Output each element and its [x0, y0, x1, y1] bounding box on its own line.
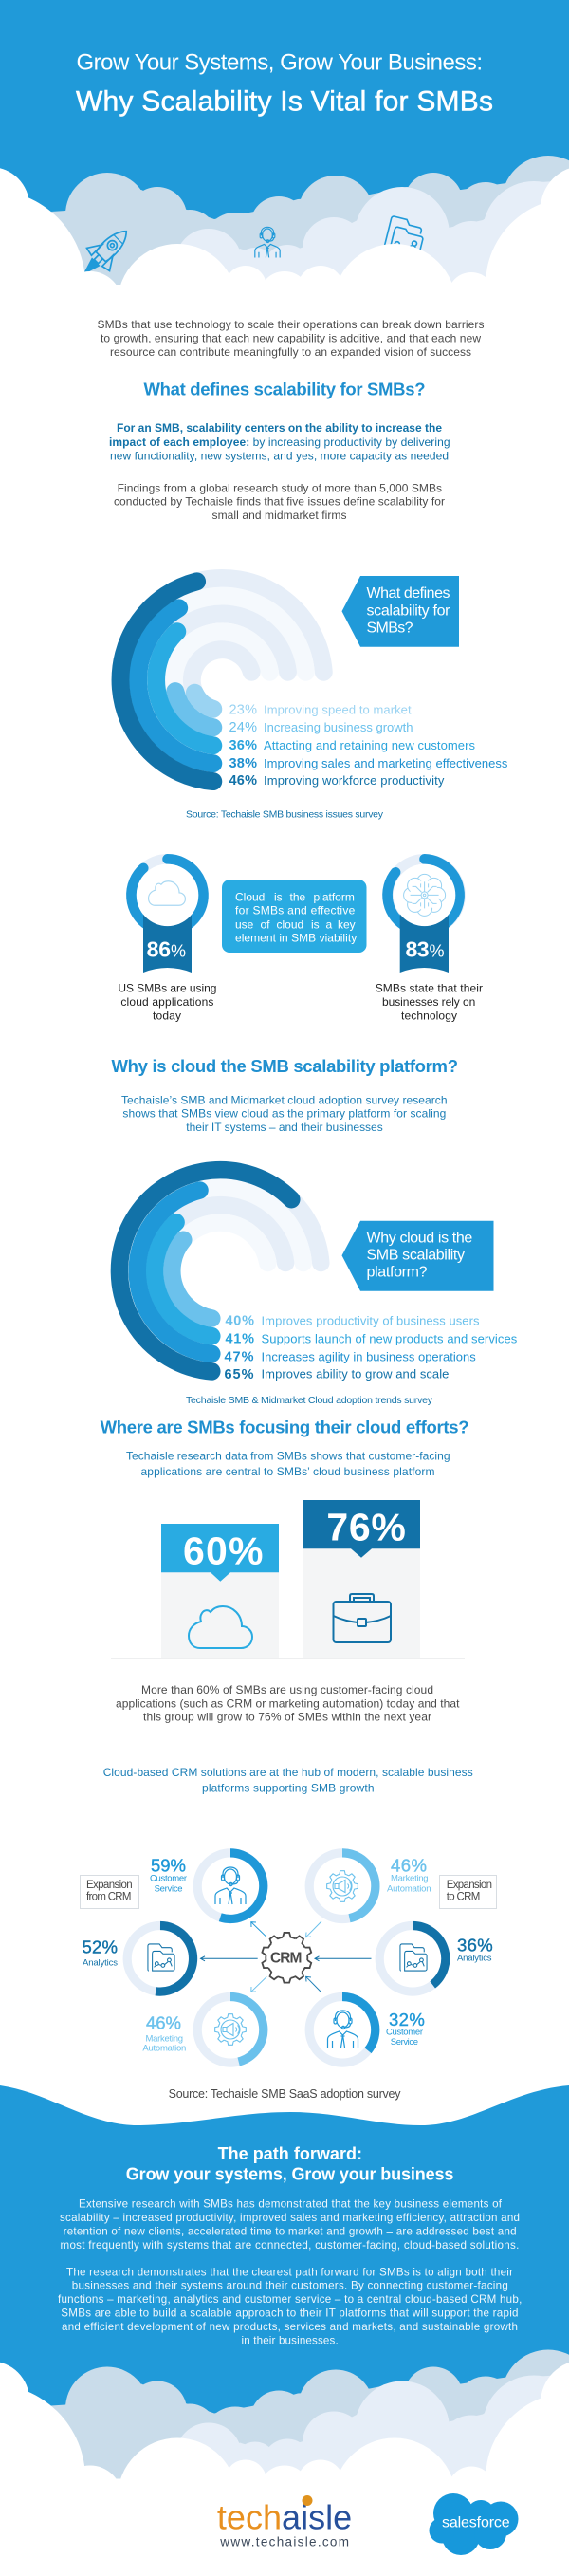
chart legend: scalability issues: 38% — [229, 756, 257, 771]
growth paragraph: More than 60% of SMBs are using customer-facing cloud — [141, 1683, 433, 1696]
chart legend: cloud benefits: 47% — [224, 1349, 254, 1364]
badge captions: businesses rely on — [382, 995, 475, 1009]
label: 46 percent marketing automation lower — [142, 2012, 186, 2054]
label: 46 percent marketing automation lower: Automation — [142, 2044, 186, 2054]
callout: why cloud: SMB scalability — [366, 1247, 465, 1263]
focus paragraph: applications are central to SMBs’ cloud business platform — [140, 1465, 434, 1478]
title: Grow Your Systems, Grow Your Business: — [76, 49, 483, 75]
intro paragraph: resource can contribute meaningfully to an expanded vision of success — [110, 345, 471, 359]
callout: what defines scalability: scalability for — [366, 602, 450, 619]
callout: cloud is the platform — [222, 880, 366, 953]
callout: cloud is the platform: use — [235, 917, 254, 931]
source note 3: Source: Techaisle SMB SaaS adoption survey — [169, 2087, 401, 2101]
intro paragraph: to growth, ensuring that each new capability is additive, and that each new — [101, 332, 481, 345]
footer paragraph 1: retention of new clients, accelerated time to market and growth – are addressed best and — [64, 2225, 517, 2237]
growth paragraph: applications (such as CRM or marketing automation) today and that — [116, 1696, 460, 1710]
chart legend: cloud benefits: 41% — [226, 1332, 254, 1347]
logo: techaisle: www.techaisle.com — [219, 2534, 349, 2548]
footer paragraph 2: in their businesses. — [241, 2334, 339, 2346]
source note 1: Source: Techaisle SMB business issues survey — [186, 809, 384, 821]
bar: 76 percent: 76% — [326, 1505, 406, 1548]
footer paragraph 2 — [58, 2266, 522, 2346]
label: 36 percent analytics: Analytics — [457, 1954, 492, 1964]
callout: why cloud: platform? — [366, 1264, 428, 1280]
chart legend: cloud benefits: Increases agility in business operations — [262, 1349, 476, 1364]
label: 32 percent customer service: Customer — [386, 2028, 423, 2038]
title: Why Scalability Is Vital for SMBs — [76, 86, 493, 118]
footer paragraph 2: businesses and their systems around their customers. By connecting customer-facing — [72, 2280, 508, 2292]
label: 32 percent customer service — [386, 2010, 425, 2048]
findings paragraph: conducted by Techaisle finds that five issues define scalability for — [114, 495, 445, 509]
header background — [0, 0, 569, 308]
chart legend: cloud benefits: Supports launch of new products and services — [262, 1332, 518, 1346]
CRM intro paragraph: Cloud-based CRM solutions are at the hub of modern, scalable business — [103, 1766, 473, 1779]
logo: salesforce: salesforce — [442, 2514, 510, 2530]
callout: cloud is the platform: for SMBs and effective — [235, 904, 356, 917]
CRM intro paragraph: platforms supporting SMB growth — [202, 1781, 374, 1794]
logo: salesforce — [429, 2493, 518, 2555]
header clouds front layer — [0, 166, 569, 380]
intro paragraph: SMBs that use technology to scale their operations can break down barriers — [97, 318, 484, 331]
heading: what defines scalability: What defines scalability for SMBs? — [144, 380, 425, 399]
findings paragraph — [114, 481, 445, 522]
chart legend: scalability issues: 36% — [229, 738, 257, 753]
label: 52 percent analytics: Analytics — [83, 1958, 118, 1969]
CRM intro paragraph — [103, 1766, 473, 1794]
cloud paragraph: Techaisle’s SMB and Midmarket cloud adoption survey research — [121, 1093, 448, 1106]
label: 46 percent marketing automation: Marketing — [391, 1874, 429, 1884]
ring: marketing automation 46 percent — [309, 1853, 376, 1918]
heading: path forward — [126, 2144, 453, 2184]
icon: rocket — [73, 220, 138, 285]
label: 46 percent marketing automation lower: Marketing — [146, 2034, 183, 2045]
chart legend: scalability issues: Improving speed to market — [264, 702, 412, 717]
growth paragraph: this group will grow to 76% of SMBs within the next year — [143, 1711, 431, 1724]
label: 46 percent marketing automation: 46% — [391, 1856, 427, 1876]
footer paragraph 1: scalability – increased productivity, improved sales and marketing efficiency, attraction and — [60, 2212, 520, 2224]
label: 32 percent customer service: 32% — [389, 2010, 425, 2029]
chart legend: cloud benefits: Improves ability to grow and scale — [262, 1366, 449, 1381]
chart legend: cloud benefits: 40% — [226, 1314, 254, 1329]
icon: circuit flower — [404, 874, 446, 916]
title — [76, 49, 493, 118]
cloud paragraph — [121, 1093, 448, 1134]
label: 59 percent customer service — [150, 1856, 187, 1894]
box: expansion to CRM: to CRM — [447, 1891, 480, 1902]
CRM hub gear: CRM — [270, 1950, 302, 1966]
box: expansion to CRM: Expansion — [447, 1880, 492, 1891]
ring: analytics 36 percent — [379, 1926, 446, 1992]
ring: marketing automation 46 percent lower — [197, 1996, 264, 2063]
cloud paragraph: their IT systems – and their businesses — [186, 1121, 383, 1134]
icon: folder — [383, 216, 427, 259]
box: expansion to CRM — [440, 1875, 497, 1909]
cloud paragraph: shows that SMBs view cloud as the primary platform for scaling — [122, 1107, 446, 1121]
callout: cloud is the platform: a — [326, 917, 332, 931]
badge: 83 percent: 83 — [406, 936, 429, 961]
footer paragraph 1: Extensive research with SMBs has demonstrated that the key business elements of — [79, 2198, 503, 2211]
chart legend: cloud benefits: 65% — [224, 1367, 254, 1382]
footer wave background — [0, 2085, 569, 2502]
callout: why cloud: Why cloud is the — [366, 1230, 472, 1246]
label: 46 percent marketing automation lower: 46% — [146, 2012, 181, 2032]
highlighted paragraph: new functionality, new systems, and yes, more capacity as needed — [110, 449, 449, 462]
callout: why cloud — [341, 1221, 493, 1291]
logo: techaisle: techaisle — [217, 2498, 352, 2537]
box: expansion from CRM — [80, 1875, 138, 1909]
label: 52 percent analytics: 52% — [82, 1937, 118, 1956]
label: 59 percent customer service: 59% — [151, 1856, 186, 1876]
chart legend: scalability issues: 24% — [229, 720, 257, 735]
ring: analytics 52 percent — [127, 1926, 193, 1992]
callout: cloud is the platform: is — [274, 890, 283, 903]
box: expansion from CRM: Expansion — [86, 1880, 133, 1891]
badge: 86 percent: % — [171, 941, 186, 960]
CRM hub gear — [260, 1933, 313, 1983]
heading: path forward: The path forward: — [218, 2144, 362, 2163]
footer paragraph 2: The research demonstrates that the clearest path forward for SMBs is to align both their — [66, 2266, 513, 2278]
label: 46 percent marketing automation — [387, 1856, 431, 1894]
footer paragraph 2: functions – marketing, analytics and customer service – to a central cloud-based CRM hub, — [58, 2293, 522, 2306]
badge captions: SMBs state that their — [376, 982, 483, 995]
highlighted paragraph — [109, 421, 450, 462]
chart legend: cloud benefits: Improves productivity of business users — [262, 1314, 480, 1328]
badge captions — [118, 982, 483, 1022]
label: 36 percent analytics: 36% — [457, 1936, 493, 1955]
label: 59 percent customer service: Customer — [150, 1874, 187, 1884]
findings paragraph: small and midmarket firms — [212, 509, 347, 522]
chart legend: scalability issues: Attacting and retaining new customers — [264, 738, 476, 752]
chart legend: scalability issues: Improving workforce productivity — [264, 773, 445, 788]
intro paragraph — [97, 318, 484, 359]
bar: 60 percent: 60% — [183, 1529, 264, 1572]
radial chart: cloud benefits — [119, 1170, 321, 1371]
label: 32 percent customer service: Service — [391, 2037, 418, 2048]
footer paragraph 2: and efficient development of new products, services and markets, and sustainable growth — [62, 2321, 518, 2333]
chart legend: scalability issues: Increasing business growth — [264, 720, 413, 734]
badge: 86 percent — [131, 859, 204, 973]
header clouds back layers — [51, 156, 569, 308]
findings paragraph: Findings from a global research study of more than 5,000 SMBs — [118, 481, 442, 494]
callout: what defines scalability: SMBs? — [366, 621, 413, 637]
icon: support agent — [255, 227, 280, 257]
label: 46 percent marketing automation: Automation — [387, 1883, 431, 1894]
badge: 86 percent: 86 — [147, 936, 171, 961]
callout: cloud is the platform: cloud — [277, 917, 303, 931]
bar: 60 percent — [161, 1524, 279, 1658]
focus paragraph — [126, 1449, 450, 1478]
chart legend: scalability issues: 46% — [229, 773, 257, 788]
label: 52 percent analytics — [82, 1937, 118, 1969]
CRM hub diagram — [80, 1853, 497, 2063]
heading: path forward: Grow your systems, Grow your business — [126, 2165, 453, 2184]
chart legend: scalability issues: Improving sales and marketing effectiveness — [264, 756, 508, 770]
ring: customer service 59 percent — [197, 1853, 264, 1919]
callout: cloud is the platform: element in SMB viability — [235, 932, 357, 945]
footer paragraph 1 — [60, 2198, 520, 2252]
radial chart: scalability issues — [120, 578, 323, 782]
callout: what defines scalability: What defines — [366, 585, 450, 602]
badge captions: today — [153, 1009, 181, 1022]
footer paragraph 2: SMBs are able to build a scalable approach to their IT platforms that will support the rapid — [61, 2307, 519, 2319]
highlighted paragraph: For an SMB, scalability centers on the ability to increase the — [117, 421, 442, 435]
footer paragraph 1: most frequently with systems that are connected, customer-facing, cloud-based solutions. — [61, 2239, 519, 2252]
growth paragraph — [116, 1683, 460, 1724]
ring: customer service 32 percent — [309, 1996, 376, 2063]
chart legend: scalability issues — [229, 702, 508, 788]
box: expansion from CRM: from CRM — [86, 1891, 131, 1902]
callout: cloud is the platform: Cloud — [235, 890, 265, 903]
chart legend: cloud benefits — [224, 1314, 518, 1382]
label: 59 percent customer service: Service — [155, 1883, 183, 1894]
badge captions: US SMBs are using — [118, 982, 216, 995]
callout: cloud is the platform: platform — [313, 890, 355, 903]
badge captions: technology — [401, 1009, 457, 1022]
focus paragraph: Techaisle research data from SMBs shows that customer-facing — [126, 1449, 450, 1462]
chart legend: scalability issues: 23% — [229, 702, 257, 717]
callout: cloud is the platform: is — [311, 917, 320, 931]
callout: cloud is the platform: the — [290, 890, 306, 903]
badge captions: cloud applications — [120, 995, 213, 1009]
callout: what defines scalability — [341, 576, 459, 647]
callout: cloud is the platform: key — [338, 917, 356, 931]
bar: 76 percent — [303, 1500, 420, 1658]
badge: 83 percent: % — [429, 941, 445, 960]
heading: why is cloud: Why is cloud the SMB scalability platform? — [112, 1056, 458, 1076]
callout: cloud is the platform: of — [260, 917, 270, 931]
icon: briefcase — [334, 1594, 391, 1642]
highlighted paragraph: impact of each employee: by increasing productivity by delivering — [109, 436, 450, 449]
footer clouds — [0, 2349, 569, 2573]
arrows: hub connections — [201, 1921, 372, 1992]
badge: 83 percent — [388, 859, 461, 973]
heading: where are SMBs focusing: Where are SMBs focusing their cloud efforts? — [101, 1418, 469, 1437]
source note 2: Techaisle SMB & Midmarket Cloud adoption trends survey — [186, 1395, 433, 1406]
